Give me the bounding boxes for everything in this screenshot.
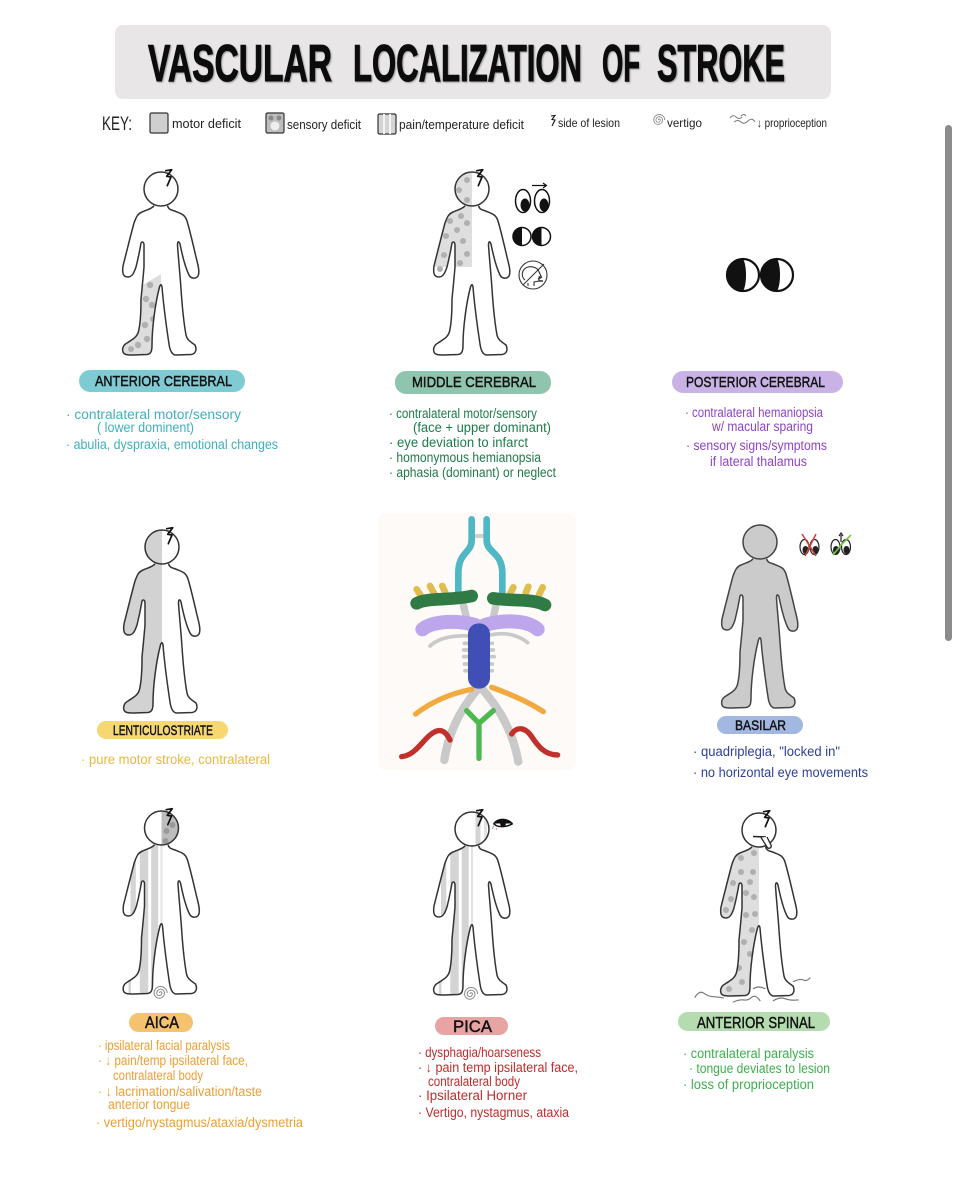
figure: lenticulostriate xyxy=(117,528,200,717)
legend key: side of lesion xyxy=(558,116,620,130)
text: anterior spinal: · loss of proprioception xyxy=(683,1077,814,1092)
text: basilar: · quadriplegia, "locked in" xyxy=(693,744,840,759)
text: posterior cerebral: · contralateral hemaniopsia xyxy=(685,405,823,420)
pill: anterior spinal: ANTERIOR SPINAL xyxy=(697,1015,815,1032)
text: posterior cerebral xyxy=(685,405,827,469)
pill: PICA: PICA xyxy=(453,1017,493,1036)
pill: lenticulostriate: LENTICULOSTRIATE xyxy=(113,722,213,738)
text: anterior spinal: · tongue deviates to lesion xyxy=(689,1061,830,1076)
figure: basilar xyxy=(722,525,798,708)
figure: AICA xyxy=(123,809,199,998)
legend key: vertigo xyxy=(667,116,702,130)
text: anterior spinal xyxy=(683,1046,830,1092)
pill: lenticulostriate xyxy=(97,721,228,739)
pill: AICA xyxy=(129,1013,193,1032)
text: PICA: · dysphagia/hoarseness xyxy=(418,1045,541,1060)
legend key: ↓ proprioception xyxy=(757,116,827,130)
title banner xyxy=(115,25,831,99)
icon: eyes deviated xyxy=(516,183,550,212)
text: anterior cerebral: ( lower dominent) xyxy=(97,420,194,435)
legend key: sensory deficit xyxy=(287,117,361,132)
title banner: VASCULAR xyxy=(148,35,332,93)
text: middle cerebral: · homonymous hemianopsia xyxy=(389,450,541,465)
title banner: OF xyxy=(602,35,640,93)
panel: circle of Willis diagram xyxy=(378,513,576,770)
pill: PICA xyxy=(435,1017,508,1036)
legend key: pain/temperature deficit xyxy=(399,117,524,132)
legend key xyxy=(102,113,827,135)
text: AICA xyxy=(96,1038,303,1130)
text: lenticulostriate: · pure motor stroke, contralateral xyxy=(81,752,270,767)
title banner: STROKE xyxy=(657,35,785,93)
pill: posterior cerebral xyxy=(672,371,843,393)
text: anterior cerebral: · abulia, dyspraxia, emotional changes xyxy=(66,437,278,452)
text: AICA: · vertigo/nystagmus/ataxia/dysmetria xyxy=(96,1115,303,1130)
icon: hemianopsia eyes xyxy=(513,228,550,246)
text: middle cerebral: · contralateral motor/sensory xyxy=(389,406,537,421)
text: anterior spinal: · contralateral paralysis xyxy=(683,1046,814,1061)
pill: basilar xyxy=(717,716,803,734)
legend key: motor deficit xyxy=(172,116,241,131)
pill: anterior cerebral xyxy=(79,370,245,392)
icon: ptosis eye xyxy=(492,819,512,830)
text: posterior cerebral: w/ macular sparing xyxy=(711,419,813,434)
figure: middle cerebral xyxy=(427,170,510,355)
text: middle cerebral: · eye deviation to infarct xyxy=(389,435,528,450)
pill: posterior cerebral: POSTERIOR CEREBRAL xyxy=(686,374,825,391)
text: anterior cerebral: · contralateral motor/sensory xyxy=(66,407,241,422)
figure: anterior cerebral xyxy=(116,170,199,359)
icon: proprioception wavy lines xyxy=(695,978,810,1002)
text: posterior cerebral: if lateral thalamus xyxy=(710,454,807,469)
text: middle cerebral: · aphasia (dominant) or neglect xyxy=(389,465,556,480)
pill: basilar: BASILAR xyxy=(735,717,786,733)
text: PICA xyxy=(418,1045,578,1120)
text: AICA: · ↓ pain/temp ipsilateral face, xyxy=(98,1053,248,1068)
text: basilar: · no horizontal eye movements xyxy=(693,765,868,780)
scrollbar xyxy=(945,125,952,641)
text: AICA: · ↓ lacrimation/salivation/taste xyxy=(98,1084,262,1099)
text: anterior cerebral xyxy=(66,407,278,452)
text: PICA: · ↓ pain temp ipsilateral face, xyxy=(418,1060,578,1075)
text: PICA: · Ipsilateral Horner xyxy=(418,1088,527,1103)
text: middle cerebral xyxy=(389,406,556,480)
text: AICA: · ipsilateral facial paralysis xyxy=(98,1038,230,1053)
text: PICA: · Vertigo, nystagmus, ataxia xyxy=(418,1105,569,1120)
icon: aphasia xyxy=(519,261,547,289)
text: basilar xyxy=(693,744,868,780)
pill: anterior cerebral: ANTERIOR CEREBRAL xyxy=(95,373,232,390)
text: PICA: contralateral body xyxy=(428,1074,520,1089)
figure: anterior spinal xyxy=(714,811,797,1000)
text: middle cerebral: (face + upper dominant) xyxy=(413,420,551,435)
text: AICA: anterior tongue xyxy=(108,1097,190,1112)
title banner: LOCALIZATION xyxy=(353,35,582,93)
pill: middle cerebral xyxy=(395,371,551,394)
icon: basilar eyes xyxy=(800,533,851,556)
text: posterior cerebral: · sensory signs/symptoms xyxy=(686,438,827,453)
pill: middle cerebral: MIDDLE CEREBRAL xyxy=(412,374,536,391)
pill: AICA: AICA xyxy=(145,1013,180,1032)
text: AICA: contralateral body xyxy=(113,1068,203,1083)
icon: posterior cerebral eyes xyxy=(727,259,793,291)
figure: PICA xyxy=(434,810,510,999)
legend key: KEY: xyxy=(102,114,132,135)
